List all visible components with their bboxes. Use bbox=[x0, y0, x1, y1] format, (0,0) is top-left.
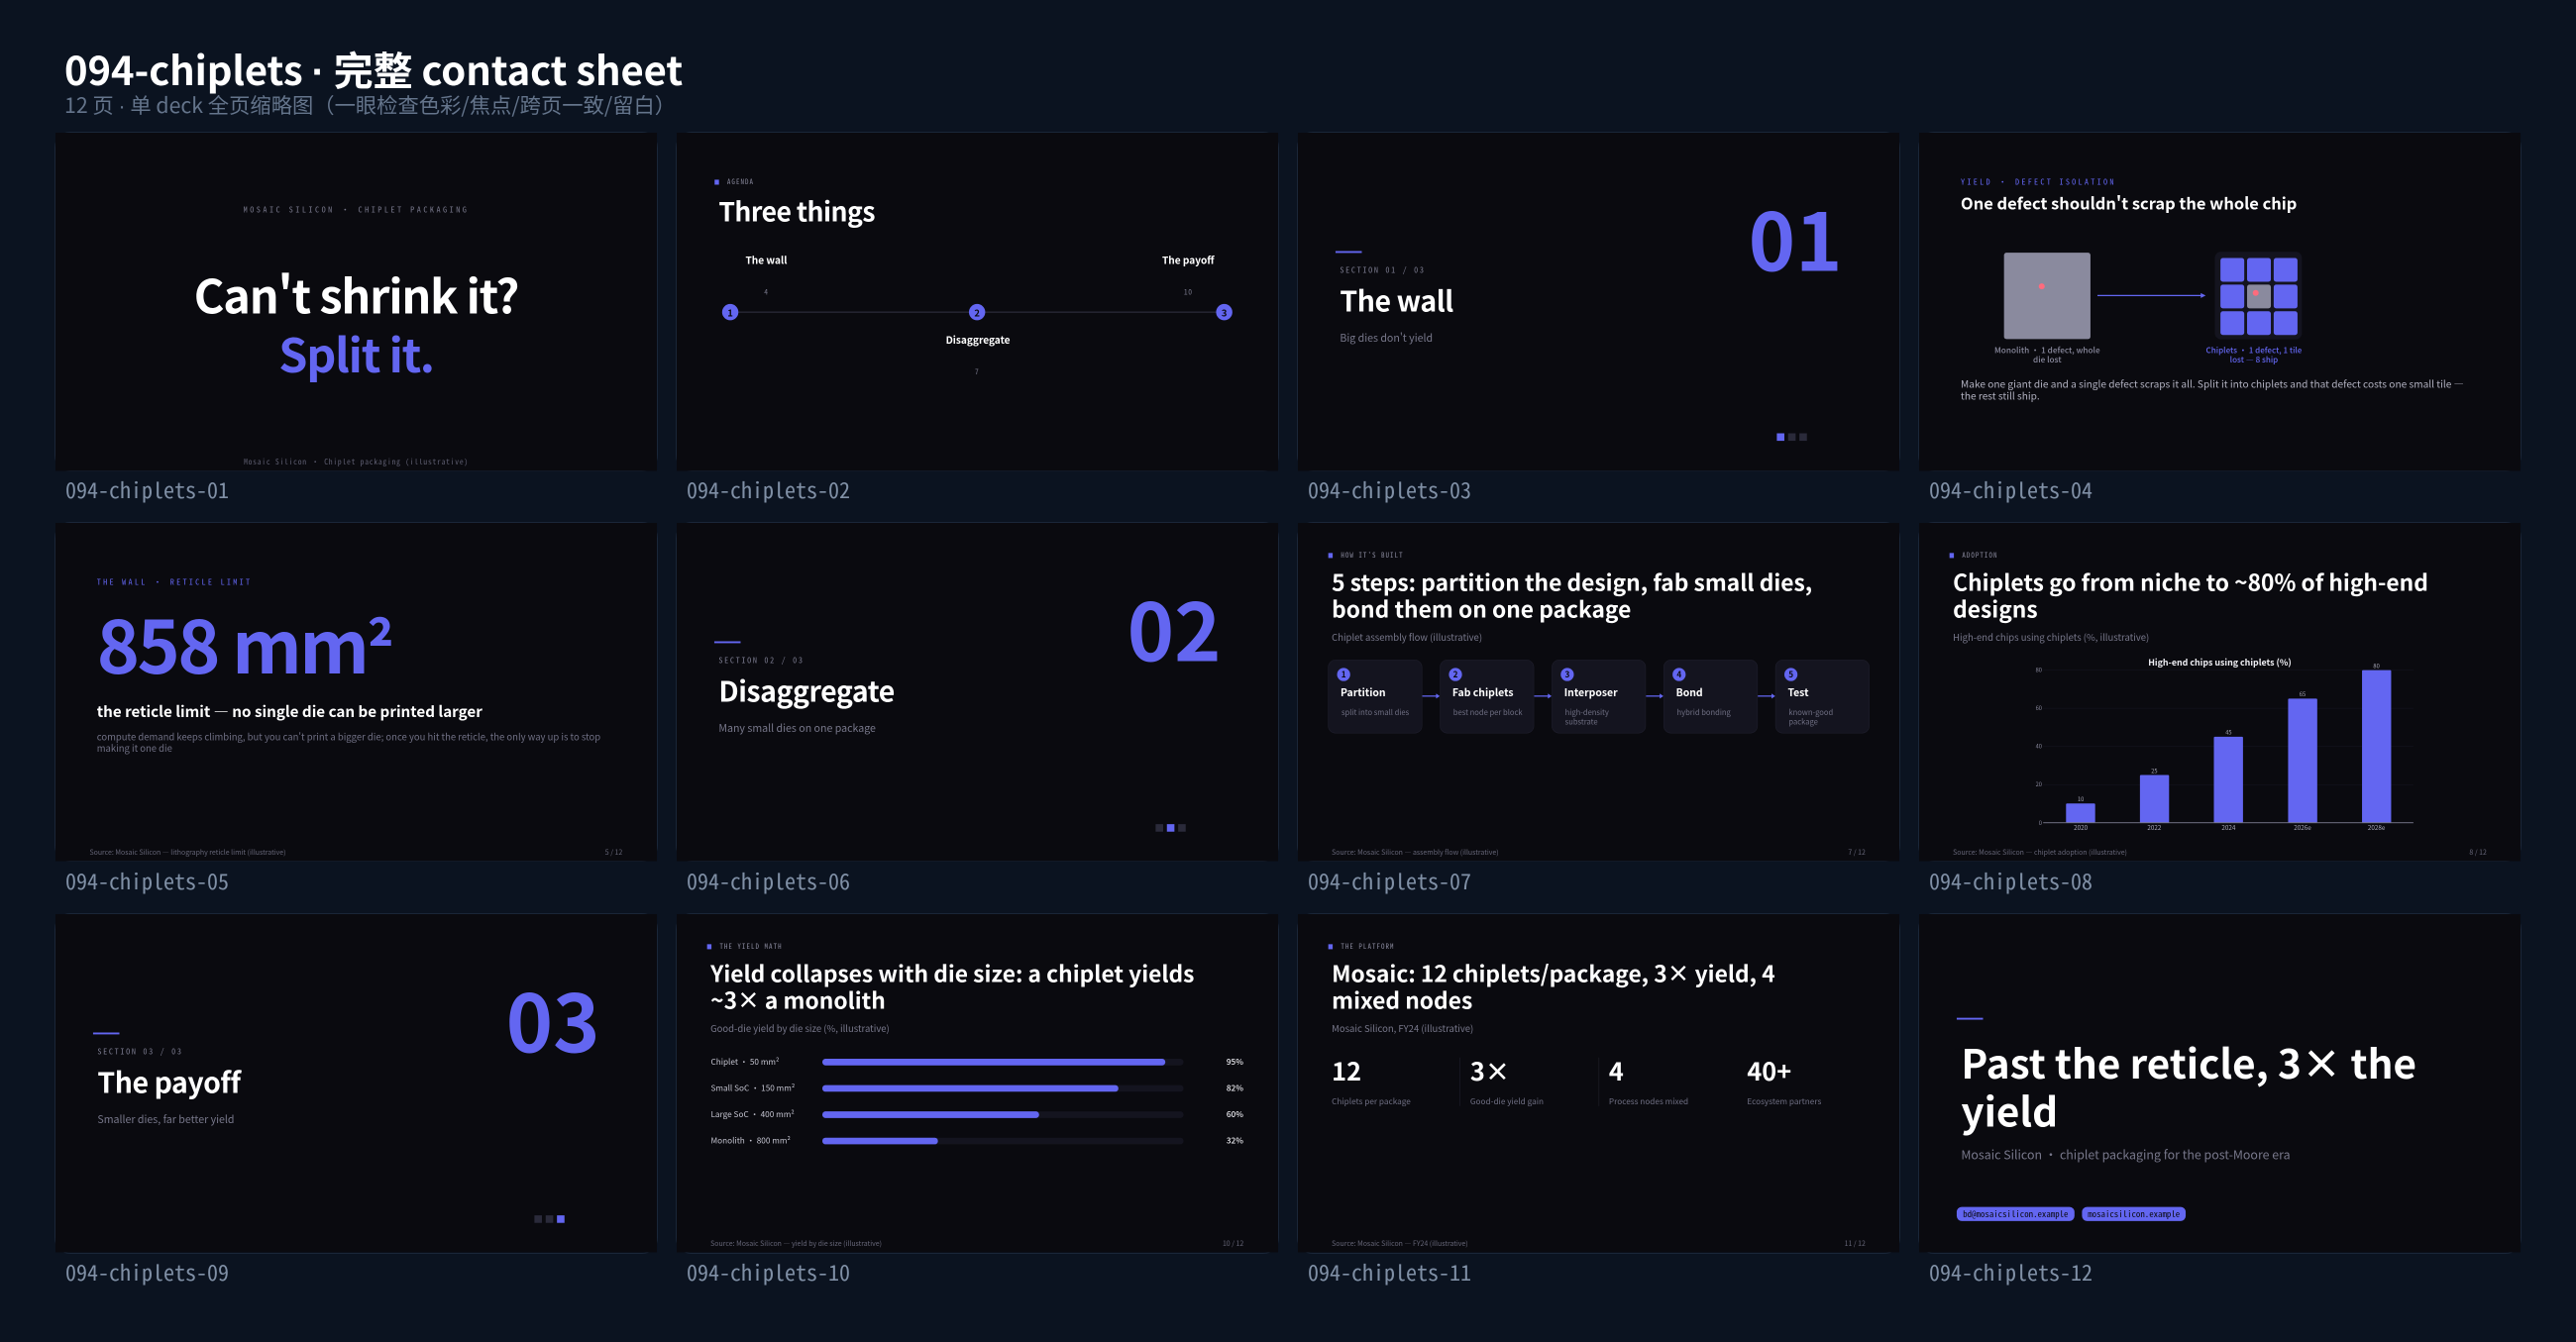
section subtitle: Smaller dies, far better yield bbox=[97, 1111, 235, 1127]
stat: 3x: 3× bbox=[1470, 1052, 1510, 1088]
heading: bond them on one package bbox=[1332, 591, 1631, 624]
bar row: Large SoC bbox=[710, 1108, 1243, 1120]
label: slide 08: 094-chiplets-08 bbox=[1929, 865, 2093, 896]
stat: 40+ bbox=[1747, 1052, 1821, 1107]
step 5: package bbox=[1788, 715, 1818, 726]
step 5: Test bbox=[1787, 684, 1808, 699]
bar chart: 2024 bbox=[2221, 823, 2236, 832]
bar row: Large SoC: Large SoC · 400 mm² bbox=[710, 1108, 795, 1120]
eyebrow marker bbox=[1329, 553, 1333, 558]
chiplets caption: lost — 8 ship bbox=[2230, 354, 2278, 365]
arrow 4 bbox=[1758, 693, 1775, 699]
step 3 bbox=[1552, 660, 1646, 733]
step 2: best node per block bbox=[1453, 706, 1523, 717]
section title: The wall bbox=[1340, 279, 1453, 320]
closing subtitle: Mosaic Silicon · chiplet packaging for the post-Moore era bbox=[1961, 1146, 2291, 1164]
label: slide 07: 094-chiplets-07 bbox=[1308, 865, 1471, 896]
label: slide 04: 094-chiplets-04 bbox=[1929, 473, 2093, 505]
bar chart: 40 bbox=[2036, 742, 2042, 751]
cover headline: Split it. bbox=[278, 319, 434, 386]
page number: 11 / 12 bbox=[1845, 1239, 1866, 1249]
timeline bbox=[721, 253, 1233, 376]
explanation bbox=[97, 729, 600, 755]
body paragraph bbox=[1961, 376, 2464, 403]
step 5: known-good bbox=[1788, 706, 1833, 717]
section number: 03 bbox=[506, 961, 599, 1076]
stat: 12: Chiplets per package bbox=[1332, 1095, 1411, 1107]
eyebrow marker bbox=[714, 179, 719, 184]
label: slide 09: 094-chiplets-09 bbox=[65, 1256, 229, 1288]
section title: The payoff bbox=[97, 1061, 241, 1101]
step 3: high-density bbox=[1565, 706, 1609, 717]
bar chart: 60 bbox=[2036, 703, 2042, 712]
heading: One defect shouldn't scrap the whole chip bbox=[1961, 190, 2297, 214]
chiplet package bbox=[2214, 252, 2302, 340]
node 2 bbox=[969, 304, 985, 320]
subheading: Good-die yield by die size (%, illustrative) bbox=[710, 1021, 890, 1035]
page number: 10 / 12 bbox=[1223, 1239, 1243, 1249]
step 4: Bond bbox=[1676, 684, 1703, 699]
eyebrow marker bbox=[707, 945, 711, 950]
eyebrow: YIELD · DEFECT ISOLATION bbox=[1961, 175, 2116, 187]
node label: The payoff: The payoff bbox=[1162, 253, 1215, 267]
subheading: Mosaic Silicon, FY24 (illustrative) bbox=[1332, 1021, 1473, 1035]
step 2: 2 bbox=[1453, 669, 1457, 680]
bar chart: 45 bbox=[2225, 728, 2232, 737]
bar row: Monolith bbox=[710, 1135, 1243, 1147]
pagination dots bbox=[1155, 824, 1186, 832]
heading bbox=[1953, 565, 2428, 624]
explanation: compute demand keeps climbing, but you can't print a bigger die; once you hit the reticle, the only way up is to stop bbox=[97, 729, 600, 743]
bar row: Chiplet: Chiplet · 50 mm² bbox=[710, 1056, 779, 1068]
panel: slide 05 big number bbox=[54, 522, 658, 862]
heading: Mosaic: 12 chiplets/package, 3× yield, 4 bbox=[1332, 956, 1775, 988]
heading: Chiplets go from niche to ~80% of high-end bbox=[1953, 565, 2428, 597]
chiplets caption: Chiplets · 1 defect, 1 tile bbox=[2206, 344, 2302, 356]
page number: 5 / 12 bbox=[605, 847, 622, 857]
node 3 bbox=[1216, 304, 1233, 320]
label: slide 06: 094-chiplets-06 bbox=[687, 865, 850, 896]
eyebrow: THE WALL · RETICLE LIMIT bbox=[97, 575, 252, 587]
stat: 12 bbox=[1332, 1052, 1411, 1107]
bar chart: 2022 bbox=[2147, 823, 2162, 832]
accent rule bbox=[714, 642, 740, 643]
footer source: Source: Mosaic Silicon — yield by die size (illustrative) bbox=[710, 1239, 882, 1249]
closing headline: yield bbox=[1961, 1081, 2058, 1138]
node 1: 1 bbox=[727, 305, 733, 319]
bar chart: 25 bbox=[2151, 766, 2158, 774]
bar row: Chiplet bbox=[710, 1056, 1243, 1068]
arrow 3 bbox=[1646, 693, 1664, 699]
bar chart: 65 bbox=[2300, 689, 2306, 698]
bar chart: 20 bbox=[2036, 779, 2042, 788]
bar chart: 2020 bbox=[2074, 823, 2089, 832]
panel: slide 08 adoption chart bbox=[1918, 522, 2522, 862]
defective tile bbox=[2247, 284, 2271, 308]
step 3: Interposer bbox=[1564, 684, 1618, 699]
footer source: Source: Mosaic Silicon — FY24 (illustrative) bbox=[1332, 1239, 1468, 1249]
step 4: 4 bbox=[1676, 669, 1681, 680]
heading: mixed nodes bbox=[1332, 982, 1472, 1015]
panel: slide 09 section bbox=[54, 913, 658, 1254]
node 1 bbox=[722, 304, 738, 320]
accent rule bbox=[93, 1033, 119, 1035]
bar row: Large SoC: 60% bbox=[1227, 1108, 1243, 1120]
page number: 7 / 12 bbox=[1848, 847, 1866, 857]
step 4 bbox=[1664, 660, 1758, 733]
label: slide 02: 094-chiplets-02 bbox=[687, 473, 850, 505]
subheading: High-end chips using chiplets (%, illustrative) bbox=[1953, 630, 2149, 644]
section number: 02 bbox=[1127, 568, 1221, 684]
monolith caption: Monolith · 1 defect, whole bbox=[1994, 344, 2100, 356]
count 10: 10 bbox=[1184, 286, 1193, 297]
contact pill: email: bd@mosaicsilicon.example bbox=[1963, 1208, 2068, 1220]
bar chart: 0 bbox=[2039, 818, 2042, 827]
explanation: making it one die bbox=[97, 741, 172, 755]
node label: Disaggregate: Disaggregate bbox=[946, 333, 1011, 347]
arrow 1 bbox=[1423, 693, 1440, 699]
node 2: 2 bbox=[974, 305, 980, 319]
label: slide 11: 094-chiplets-11 bbox=[1308, 1256, 1471, 1288]
eyebrow marker bbox=[1950, 553, 1954, 558]
bar row: Small SoC: Small SoC · 150 mm² bbox=[710, 1083, 795, 1093]
chiplets caption bbox=[2205, 344, 2302, 365]
label: slide 01: 094-chiplets-01 bbox=[65, 473, 229, 505]
bar row: Monolith: 32% bbox=[1227, 1135, 1243, 1147]
bar row: Monolith: Monolith · 800 mm² bbox=[710, 1135, 791, 1147]
panel: slide 07 process bbox=[1297, 522, 1900, 862]
cover headline: Can't shrink it? bbox=[194, 259, 518, 327]
panel: slide 11 stats bbox=[1297, 913, 1900, 1254]
divider 1 bbox=[1458, 1058, 1461, 1106]
stat: 40+: 40+ bbox=[1747, 1052, 1791, 1088]
panel: slide 01 cover bbox=[54, 132, 658, 471]
heading bbox=[1332, 565, 1812, 624]
eyebrow: MOSAIC SILICON · CHIPLET PACKAGING bbox=[244, 203, 469, 215]
eyebrow: ADOPTION bbox=[1962, 550, 1997, 560]
step 4: hybrid bonding bbox=[1677, 706, 1731, 717]
monolith die bbox=[2004, 253, 2091, 339]
heading: Yield collapses with die size: a chiplet yields bbox=[710, 956, 1194, 988]
step 1 bbox=[1328, 660, 1423, 733]
step 5: 5 bbox=[1788, 669, 1793, 680]
body paragraph: the rest still ship. bbox=[1961, 388, 2040, 403]
eyebrow: AGENDA bbox=[727, 176, 754, 186]
section kicker: SECTION 02 / 03 bbox=[718, 654, 805, 666]
node label: The wall: The wall bbox=[745, 253, 787, 267]
footer: Mosaic Silicon · Chiplet packaging (illustrative) bbox=[244, 456, 469, 466]
heading: ~3× a monolith bbox=[710, 982, 886, 1015]
stat: 40+: Ecosystem partners bbox=[1747, 1095, 1821, 1107]
arrow bbox=[2096, 293, 2205, 298]
pagination dots bbox=[1776, 434, 1807, 442]
footer source: Source: Mosaic Silicon — chiplet adoption (illustrative) bbox=[1953, 847, 2127, 857]
heading bbox=[1332, 956, 1775, 1015]
bar row: Small SoC: 82% bbox=[1227, 1083, 1243, 1093]
stat: 4: Process nodes mixed bbox=[1609, 1095, 1688, 1107]
divider 2 bbox=[1598, 1058, 1600, 1106]
panel: slide 02 agenda bbox=[676, 132, 1279, 471]
section title: Disaggregate bbox=[718, 670, 895, 710]
step 1: 1 bbox=[1342, 669, 1346, 680]
section subtitle: Many small dies on one package bbox=[718, 720, 876, 735]
stat: 3x bbox=[1470, 1052, 1544, 1107]
timeline line bbox=[730, 312, 1225, 313]
statement: the reticle limit — no single die can be printed larger bbox=[97, 699, 483, 721]
step 3: substrate bbox=[1565, 715, 1598, 726]
label: slide 12: 094-chiplets-12 bbox=[1929, 1256, 2093, 1288]
stat: 4: 4 bbox=[1609, 1052, 1624, 1088]
accent rule bbox=[1336, 252, 1361, 253]
step 1: split into small dies bbox=[1342, 706, 1409, 717]
label: slide 10: 094-chiplets-10 bbox=[687, 1256, 850, 1288]
big number: 858 mm² bbox=[97, 589, 391, 694]
title: 094-chiplets · 完整 contact sheet bbox=[64, 40, 683, 97]
panel: slide 04 defect isolation bbox=[1918, 132, 2522, 471]
panel: slide 12 closing bbox=[1918, 913, 2522, 1254]
closing headline: Past the reticle, 3× the bbox=[1961, 1032, 2416, 1090]
node 3: 3 bbox=[1222, 305, 1227, 319]
bar chart: 2028e bbox=[2368, 823, 2386, 832]
label: slide 05: 094-chiplets-05 bbox=[65, 865, 229, 896]
defect dot bbox=[2039, 283, 2045, 289]
heading: Three things bbox=[718, 191, 875, 229]
step 1: Partition bbox=[1341, 684, 1386, 699]
step 3: 3 bbox=[1564, 669, 1569, 680]
bar chart: High-end chips using chiplets (%) bbox=[2148, 656, 2292, 669]
step 2 bbox=[1440, 660, 1534, 733]
subheading: Chiplet assembly flow (illustrative) bbox=[1332, 630, 1482, 644]
section subtitle: Big dies don't yield bbox=[1340, 330, 1433, 345]
arrow 2 bbox=[1534, 693, 1552, 699]
contact pill: website: mosaicsilicon.example bbox=[2088, 1208, 2180, 1220]
heading: designs bbox=[1953, 591, 2038, 624]
closing headline bbox=[1961, 1032, 2416, 1138]
section kicker: SECTION 01 / 03 bbox=[1340, 263, 1426, 275]
bar row: Chiplet: 95% bbox=[1227, 1056, 1243, 1068]
eyebrow: HOW IT'S BUILT bbox=[1341, 550, 1404, 560]
pagination dots bbox=[535, 1215, 565, 1223]
eyebrow marker bbox=[1329, 945, 1333, 950]
accent rule bbox=[1957, 1018, 1983, 1020]
stat: 12: 12 bbox=[1332, 1052, 1361, 1088]
count 7: 7 bbox=[975, 365, 979, 376]
step 5 bbox=[1775, 660, 1870, 733]
step 2: Fab chiplets bbox=[1452, 684, 1514, 699]
panel: slide 10 yield bars bbox=[676, 913, 1279, 1254]
bar chart bbox=[2035, 656, 2414, 832]
bar chart: 2026e bbox=[2294, 823, 2311, 832]
section number: 01 bbox=[1749, 178, 1842, 294]
page number: 8 / 12 bbox=[2469, 847, 2487, 857]
section kicker: SECTION 03 / 03 bbox=[97, 1045, 183, 1057]
heading bbox=[710, 956, 1194, 1015]
heading: 5 steps: partition the design, fab small dies, bbox=[1332, 565, 1812, 597]
monolith caption bbox=[1994, 344, 2100, 365]
monolith caption: die lost bbox=[2033, 354, 2062, 365]
bar chart: 80 bbox=[2373, 661, 2380, 670]
footer source: Source: Mosaic Silicon — assembly flow (illustrative) bbox=[1332, 847, 1499, 857]
subtitle: 12 页 · 单 deck 全页缩略图（一眼检查色彩/焦点/跨页一致/留白） bbox=[64, 89, 676, 120]
bar chart: 80 bbox=[2036, 665, 2042, 673]
eyebrow: THE YIELD MATH bbox=[719, 941, 783, 952]
bar row: Small SoC bbox=[710, 1083, 1243, 1093]
footer source: Source: Mosaic Silicon — lithography reticle limit (illustrative) bbox=[89, 847, 285, 857]
panel: slide 03 section bbox=[1297, 132, 1900, 471]
eyebrow: THE PLATFORM bbox=[1341, 941, 1395, 952]
bar chart: 10 bbox=[2078, 794, 2084, 803]
panel: slide 06 section bbox=[676, 522, 1279, 862]
label: slide 03: 094-chiplets-03 bbox=[1308, 473, 1471, 505]
body paragraph: Make one giant die and a single defect scraps it all. Split it into chiplets and that defect costs one small tile — bbox=[1961, 376, 2464, 391]
stat: 4 bbox=[1609, 1052, 1688, 1107]
count 4: 4 bbox=[764, 286, 769, 297]
stat: 3x: Good-die yield gain bbox=[1470, 1095, 1544, 1107]
cover headline bbox=[194, 259, 518, 386]
